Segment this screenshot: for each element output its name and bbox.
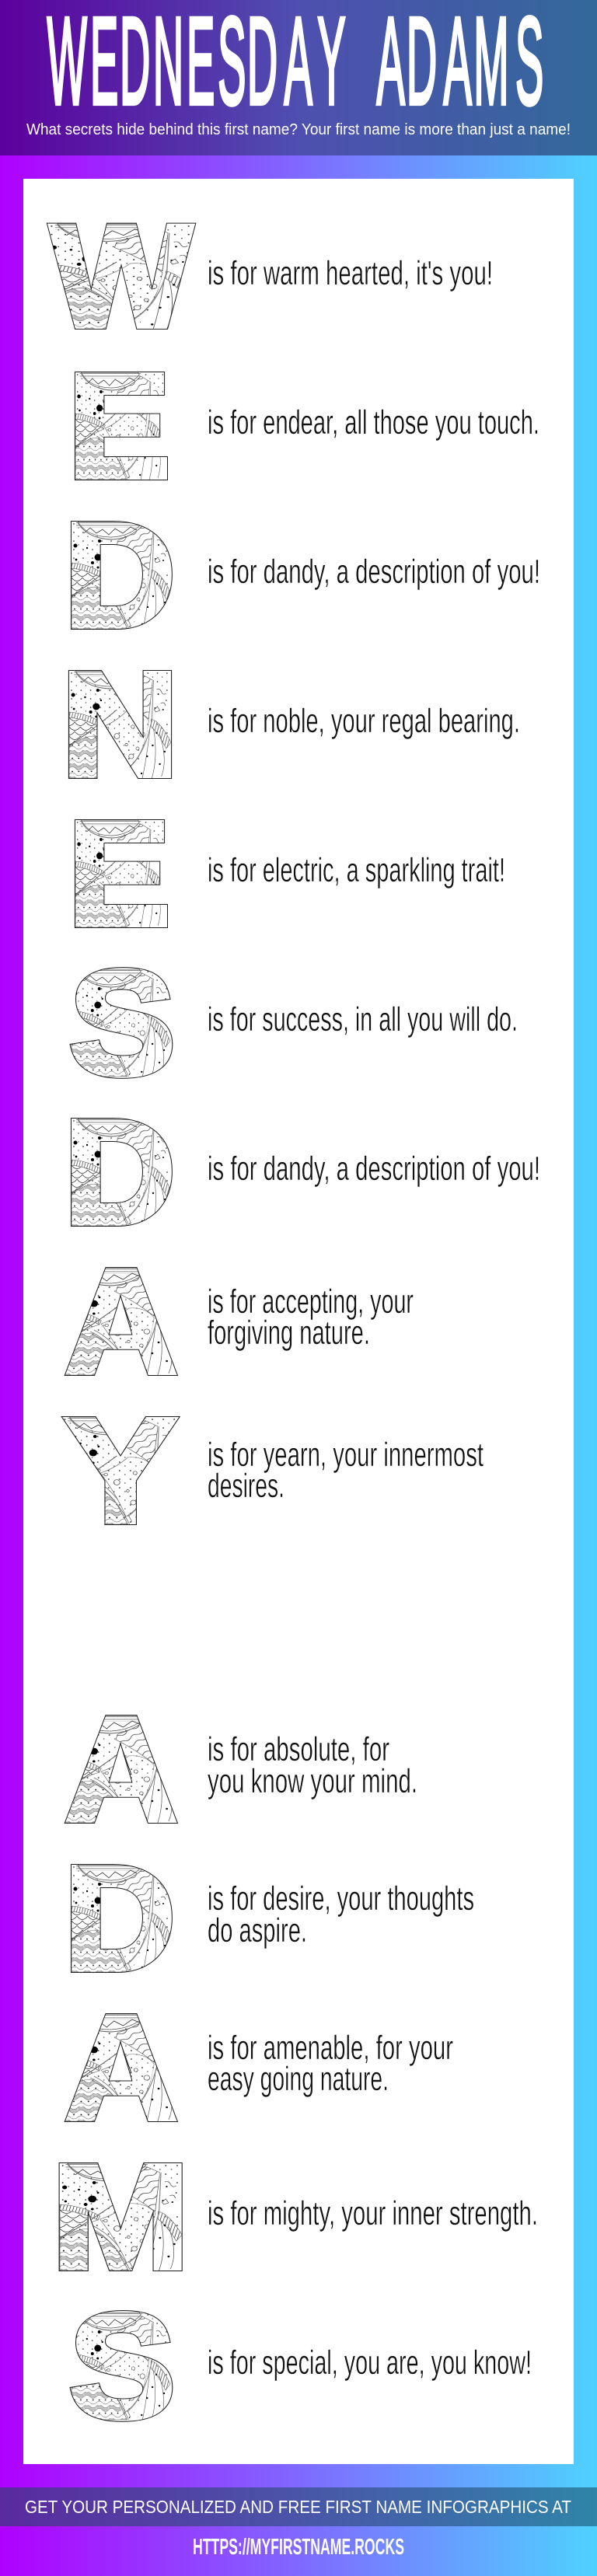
row: D [65,1835,474,2000]
footer band [0,2487,597,2526]
icon: letter E [75,819,168,928]
icon: letter D: D [65,492,175,657]
icon: letter N: N [62,643,179,807]
row: Y [61,1416,484,1525]
subtitle: What secrets hide behind this first name? Your first name is more than just a name! [26,121,571,138]
icon: letter A [64,1267,179,1376]
text: Y lines [208,1436,484,1505]
text: A lines [208,1283,414,1352]
icon: letter A [64,1715,179,1824]
icon: letter D [70,521,173,630]
text: A lines [208,1730,417,1800]
icon: letter Y [61,1416,180,1525]
text: D lines: do aspire. [208,1911,307,1949]
row: A [58,1984,453,2149]
row: E [68,791,505,955]
row: D [65,1089,540,1254]
row: A [64,1715,415,1824]
icon: letter D [70,1118,173,1227]
icon: letter S: S [70,2285,175,2449]
text: A lines: is for absolute, for [208,1730,389,1768]
row: S [69,2310,530,2422]
text: D lines [208,1880,474,1949]
icon: letter A: A [66,1686,176,1851]
row: M [52,2134,538,2299]
row: A [64,1267,414,1376]
icon: letter D: D [65,1835,175,2000]
icon: letter W [47,222,196,330]
icon: letter A: A [66,1984,176,2149]
text: A lines: forgiving nature. [208,1314,370,1352]
row: W [43,196,493,356]
icon: letter Y: Y [65,1388,176,1553]
icon: letter D: D [65,1089,175,1254]
icon: letter S: S [70,941,175,1105]
text: A lines: is for amenable, for your [208,2029,453,2067]
icon: letter A [64,2013,179,2122]
text: A lines: easy going nature. [208,2060,389,2098]
text: A lines [208,2029,453,2098]
row: E [68,344,539,508]
row: N [62,643,520,807]
header banner [0,0,597,155]
icon: letter M [59,2162,183,2271]
text: Y lines: desires. [208,1467,285,1505]
icon: letter M: M [52,2134,189,2299]
icon: letter S [69,967,173,1079]
row: D [65,492,540,657]
row: S [68,941,518,1105]
icon: letter S [69,2310,173,2422]
footer url: HTTPS://MYFIRSTNAME.ROCKS [193,2535,404,2560]
text: A lines: you know your mind. [208,1762,417,1800]
icon: letter E: E [68,791,169,955]
icon: letter N [68,670,173,779]
icon: letter E: E [68,344,169,508]
icon: letter A: A [66,1238,176,1403]
icon: letter E [75,372,168,480]
text: A lines: is for accepting, your [208,1283,414,1321]
icon: letter W: W [51,196,192,356]
icon: letter D [70,1864,173,1973]
